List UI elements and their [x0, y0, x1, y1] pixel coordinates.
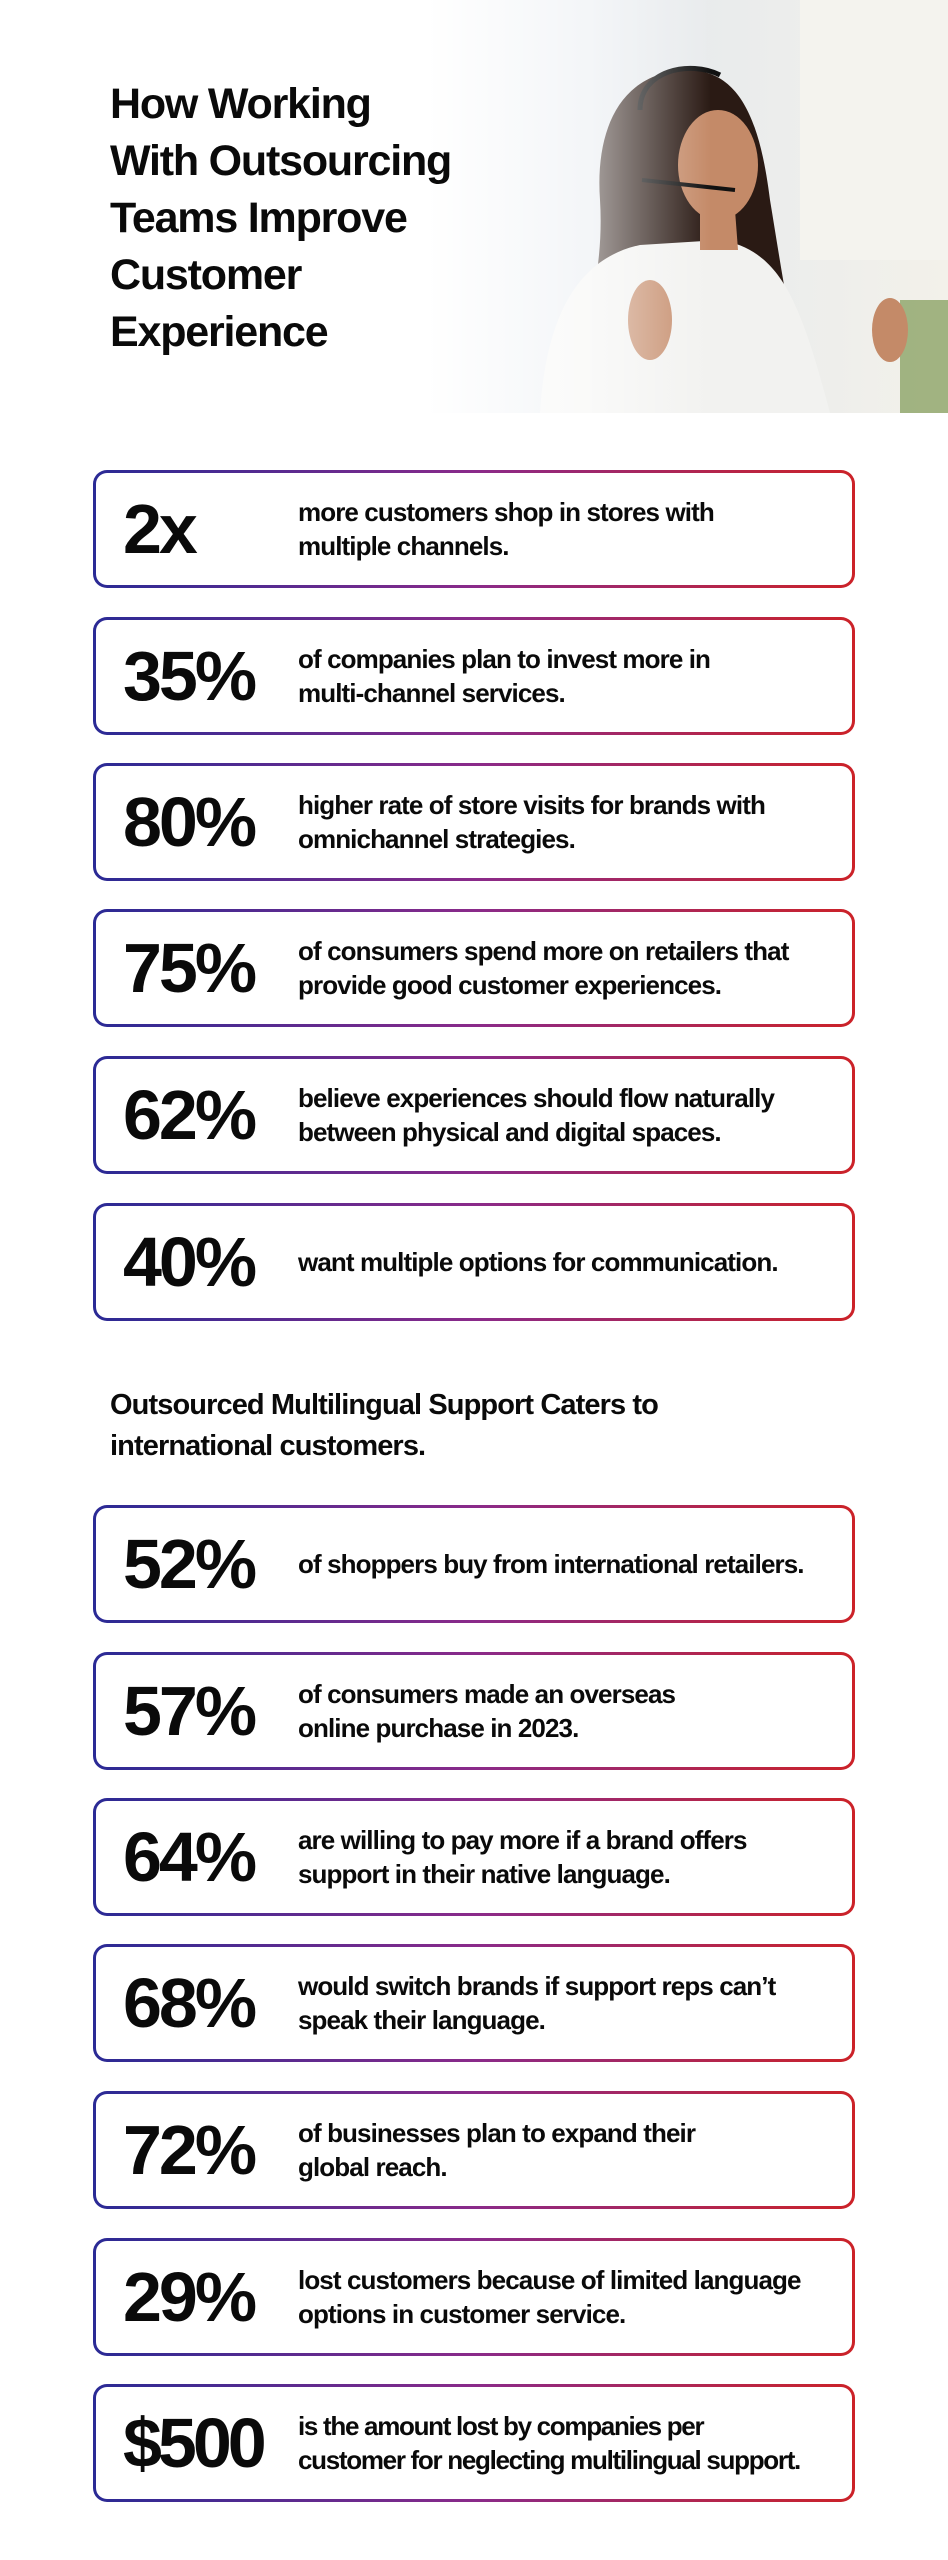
- section heading: [110, 1389, 658, 1462]
- card: 2x: 2x: [123, 490, 195, 568]
- card: 64%: [93, 1798, 855, 1916]
- card: 2x: more customers shop in stores with: [298, 497, 714, 527]
- card: 29%: [93, 2238, 855, 2356]
- card: 40%: 40%: [123, 1223, 254, 1301]
- hero photo: [538, 0, 948, 413]
- card: $500: customer for neglecting multilingual support.: [298, 2445, 800, 2475]
- title: [110, 80, 451, 356]
- card: 52%: of shoppers buy from international retailers.: [298, 1549, 804, 1579]
- card: 75%: provide good customer experiences.: [298, 970, 721, 1000]
- card: 62%: [93, 1056, 855, 1174]
- card: $500: [93, 2384, 855, 2502]
- card: 29%: options in customer service.: [298, 2299, 625, 2329]
- card: 35%: 35%: [123, 637, 254, 715]
- card: 62%: 62%: [123, 1076, 254, 1154]
- card: 72%: of businesses plan to expand their: [298, 2118, 695, 2148]
- section heading: international customers.: [110, 1430, 425, 1462]
- card: 68%: [93, 1944, 855, 2062]
- section heading: Outsourced Multilingual Support Caters to: [110, 1389, 658, 1421]
- card: 2x: [93, 470, 855, 588]
- card: 29%: 29%: [123, 2258, 254, 2336]
- card: 2x: multiple channels.: [298, 531, 509, 561]
- title: With Outsourcing: [110, 137, 451, 185]
- shirt: [540, 240, 830, 413]
- card: 57%: of consumers made an overseas: [298, 1679, 675, 1709]
- card: 57%: [93, 1652, 855, 1770]
- hands: [628, 280, 672, 360]
- card: 68%: 68%: [123, 1964, 254, 2042]
- card: 72%: 72%: [123, 2111, 254, 2189]
- card: 62%: believe experiences should flow naturally: [298, 1083, 774, 1113]
- card: 35%: multi-channel services.: [298, 678, 565, 708]
- card: 57%: 57%: [123, 1672, 254, 1750]
- title: Customer: [110, 251, 301, 299]
- title: Teams Improve: [110, 194, 407, 242]
- card: 52%: [93, 1505, 855, 1623]
- card: 75%: of consumers spend more on retailers that: [298, 936, 788, 966]
- card: 75%: [93, 909, 855, 1027]
- card: 80%: 80%: [123, 783, 254, 861]
- card: 29%: lost customers because of limited language: [298, 2265, 801, 2295]
- hair: [560, 70, 810, 413]
- card: 80%: [93, 763, 855, 881]
- card: $500: $500: [123, 2404, 263, 2482]
- card: 64%: 64%: [123, 1818, 254, 1896]
- card: 80%: omnichannel strategies.: [298, 824, 575, 854]
- card: 52%: 52%: [123, 1525, 254, 1603]
- face: [678, 110, 758, 220]
- headset: [640, 68, 720, 110]
- card: 57%: online purchase in 2023.: [298, 1713, 578, 1743]
- card: 72%: global reach.: [298, 2152, 447, 2182]
- card: $500: is the amount lost by companies per: [298, 2411, 703, 2441]
- card: 35%: of companies plan to invest more in: [298, 644, 710, 674]
- card: 68%: would switch brands if support reps can’t: [298, 1971, 775, 2001]
- card: 40%: [93, 1203, 855, 1321]
- card: 62%: between physical and digital spaces.: [298, 1117, 721, 1147]
- card: 35%: [93, 617, 855, 735]
- card: 40%: want multiple options for communication.: [298, 1247, 778, 1277]
- card: 64%: support in their native language.: [298, 1859, 670, 1889]
- card: 64%: are willing to pay more if a brand offers: [298, 1825, 747, 1855]
- title: How Working: [110, 80, 371, 128]
- card: 68%: speak their language.: [298, 2005, 545, 2035]
- card: 75%: 75%: [123, 929, 254, 1007]
- card: 72%: [93, 2091, 855, 2209]
- title: Experience: [110, 308, 327, 356]
- card: 80%: higher rate of store visits for brands with: [298, 790, 765, 820]
